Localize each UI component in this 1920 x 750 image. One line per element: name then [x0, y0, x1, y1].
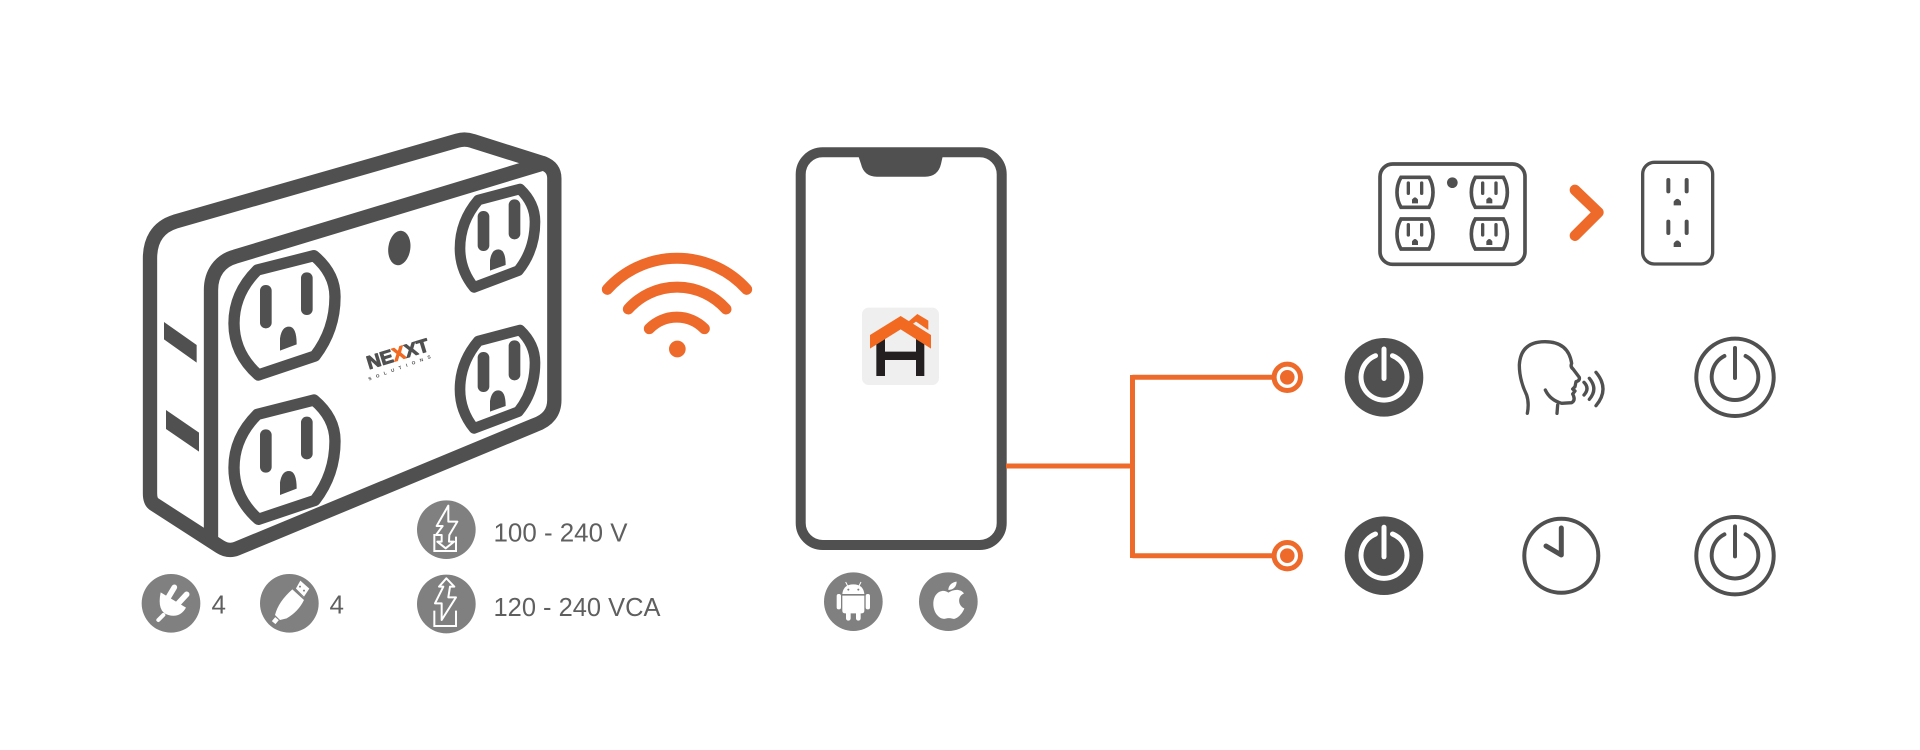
smart outlet device illustration: [150, 140, 554, 550]
wifi symbol: [607, 258, 747, 357]
icon: voltage out: [417, 575, 476, 633]
icon: power button outline (row 2): [1696, 517, 1774, 594]
icon: power button solid (row 2): [1345, 516, 1423, 595]
wall outlet plate icon: [1643, 162, 1713, 264]
usb count: [260, 574, 344, 633]
smartphone: [801, 152, 1002, 545]
brand logo: NEXXT: [364, 334, 432, 373]
icon: power button outline (row 1): [1696, 339, 1774, 416]
icon: power button solid (row 1): [1345, 338, 1423, 417]
icon: voltage in: [417, 500, 476, 559]
number of usb ports: 4: [330, 589, 344, 619]
apple badge: [919, 572, 978, 631]
icon: usb: [260, 574, 319, 633]
android badge: [824, 572, 883, 631]
connector tree from phone: [1006, 364, 1301, 569]
quad outlet plate icon: [1380, 164, 1525, 264]
device front panel edge: [211, 163, 543, 539]
outlet: top right: [460, 189, 535, 287]
phone frame: [801, 152, 1002, 545]
phone notch: [858, 155, 943, 177]
indicator light: [386, 229, 413, 267]
icon: plug: [142, 574, 200, 633]
icon: clock timer: [1524, 519, 1598, 593]
icon: voice control head: [1519, 342, 1603, 413]
arrow chevron: [1575, 190, 1598, 236]
outlet: bottom left: [234, 400, 335, 519]
output voltage value: 120 - 240 VCA: [494, 592, 661, 622]
output voltage: [417, 575, 661, 633]
number of plugs: 4: [212, 589, 226, 619]
device body outline: [150, 140, 554, 550]
outlet: top left: [234, 256, 335, 375]
input voltage: [417, 500, 628, 559]
outlet: bottom right: [460, 330, 535, 428]
app icon: [862, 308, 939, 385]
side USB port 2: [166, 410, 199, 452]
brand logo: SOLUTIONS: [368, 354, 431, 382]
input voltage value: 100 - 240 V: [494, 518, 628, 548]
plug count: [142, 574, 226, 633]
side USB port 1: [164, 322, 197, 363]
